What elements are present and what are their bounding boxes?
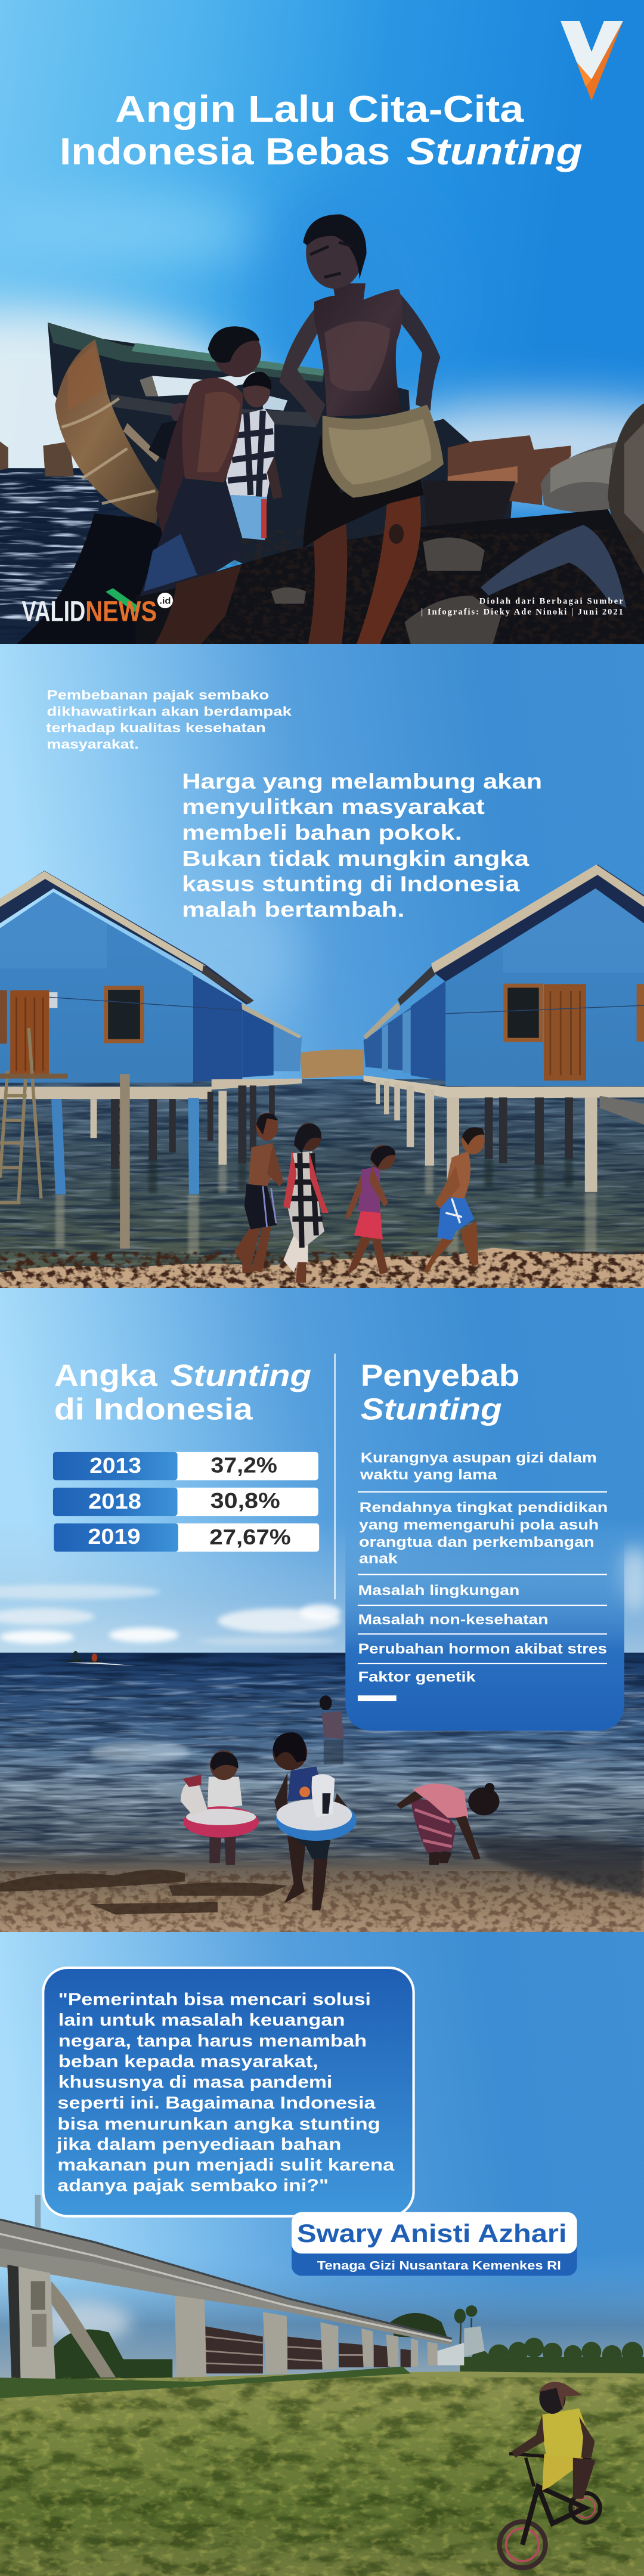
hero sky [0, 0, 644, 571]
main statement text: malah bertambah. [182, 897, 404, 921]
causes list: orangtua dan perkembangan [359, 1534, 595, 1550]
logo: validnews.id: .id [159, 596, 171, 606]
flooded water [0, 1079, 644, 1288]
rubble ground [135, 509, 644, 644]
heading: causes: Stunting [361, 1392, 502, 1426]
small lead text: Pembebanan pajak sembako [47, 688, 269, 702]
panel: expert quote [0, 1932, 644, 2576]
left row of houses [0, 871, 302, 1083]
person sitting on wreck [148, 403, 184, 460]
logo: validnews.id [22, 588, 173, 627]
title: Stunting [407, 131, 583, 173]
row 2018: 2018 [88, 1490, 141, 1513]
grass field [0, 2367, 644, 2576]
main statement text: Bukan tidak mungkin angka [182, 846, 530, 871]
title [60, 89, 583, 173]
panel: hero [0, 0, 644, 644]
heading: stunting rate: Stunting [171, 1358, 311, 1392]
name badge: Swary Anisti Azhari [297, 2219, 567, 2248]
heading: stunting rate: di Indonesia [54, 1392, 253, 1426]
causes list: Kurangnya asupan gizi dalam [361, 1450, 597, 1466]
bridge [0, 2195, 452, 2379]
distant mound [300, 1049, 364, 1079]
row 2018 [53, 1488, 318, 1516]
stilts and decks [0, 1074, 644, 1249]
row 2019: 2019 [88, 1525, 141, 1549]
small lead text [46, 688, 292, 752]
wet sand beach [0, 1837, 644, 1932]
logo: validnews.id: NEWS [85, 595, 157, 627]
quote card: beban kepada masyarakat, [58, 2052, 318, 2071]
main statement text: membeli bahan pokok. [182, 821, 462, 845]
causes list: Faktor genetik [358, 1669, 476, 1685]
panel: causes card [345, 1358, 624, 1731]
main statement text: Harga yang melambung akan [182, 769, 542, 793]
source credit: Diolah dari Berbagai Sumber [479, 597, 623, 606]
row 2019 [54, 1524, 319, 1552]
quote card: adanya pajak sembako ini?" [57, 2176, 329, 2195]
main statement text [182, 769, 542, 921]
main statement text: kasus stunting di Indonesia [182, 872, 520, 896]
quote card: lain untuk masalah keuangan [58, 2010, 345, 2029]
rusty hull plate [55, 339, 161, 524]
row 2013: 37,2% [210, 1453, 277, 1477]
name badge: Tenaga Gizi Nusantara Kemenkes RI [317, 2259, 561, 2272]
jet skis [66, 1651, 135, 1666]
quote card [43, 1968, 414, 2216]
right row of houses [363, 865, 644, 1086]
wooden ladder [0, 1028, 68, 1203]
child 1 [234, 1113, 283, 1273]
causes list: Rendahnya tingkat pendidikan [360, 1500, 608, 1516]
quote card: makanan pun menjadi sulit karena [57, 2155, 395, 2174]
logo: V mark [561, 21, 623, 101]
ocean [0, 1653, 644, 1884]
wading person [320, 1695, 344, 1764]
causes list: waktu yang lama [360, 1467, 497, 1483]
quote card: jika dalam penyediaan bahan [56, 2135, 341, 2154]
girl bending over [397, 1783, 500, 1865]
heading: causes [361, 1358, 519, 1426]
name badge [292, 2212, 577, 2276]
sea water [0, 468, 172, 644]
quote card: bisa menurunkan angka stunting [57, 2114, 380, 2133]
rocks [540, 403, 644, 579]
heading: stunting rate [54, 1358, 311, 1426]
logo: validnews.id: VALID [22, 595, 85, 627]
row 2018: 30,8% [210, 1489, 280, 1513]
row 2019: 27,67% [209, 1525, 291, 1549]
treeline [54, 2305, 644, 2380]
small lead text: masyarakat. [47, 737, 139, 752]
source credit: | Infografis: Dieky Ade Ninoki | Juni 2021 [421, 607, 623, 617]
vertical divider [335, 1354, 336, 1599]
houses sky [0, 644, 644, 1096]
causes list: Masalah lingkungan [358, 1583, 519, 1599]
quote card: khususnya di masa pandemi [58, 2072, 332, 2091]
small boy in plaid shirt [226, 372, 283, 540]
causes list: Masalah non-kesehatan [358, 1612, 549, 1628]
source credit [421, 597, 623, 617]
child 3 [345, 1145, 395, 1274]
shipwreck [48, 323, 513, 583]
rubble shore [0, 1248, 644, 1288]
row 2013: 2013 [89, 1454, 141, 1478]
title: Angin Lalu Cita-Cita [115, 89, 524, 131]
heading: causes: Penyebab [361, 1358, 519, 1392]
child on bicycle [500, 2382, 600, 2568]
panel: statistics and causes [0, 1288, 644, 1932]
quote card: negara, tanpa harus menambah [58, 2031, 367, 2050]
child with white float [273, 1732, 357, 1910]
main statement text: menyulitkan masyarakat [182, 794, 485, 819]
toddler with pink float [181, 1751, 259, 1865]
child 4 [425, 1128, 485, 1274]
causes list: anak [359, 1550, 398, 1566]
causes list [358, 1450, 608, 1701]
quote card: seperti ini. Bagaimana Indonesia [57, 2093, 376, 2112]
rusty ships on the right [423, 435, 571, 534]
row 2013 [53, 1452, 318, 1480]
beach sky [0, 1288, 644, 1658]
quote card: "Pemerintah bisa mencari solusi [58, 1990, 371, 2009]
causes list: Perubahan hormon akibat stres [358, 1641, 607, 1657]
middle boy [140, 326, 261, 644]
causes list: yang memengaruhi pola asuh [359, 1517, 599, 1533]
table: stunting by year [53, 1452, 319, 1552]
title: Indonesia Bebas [60, 131, 390, 173]
child 2 [283, 1123, 329, 1283]
small lead text: dikhawatirkan akan berdampak [47, 704, 292, 719]
big boy with sack [279, 215, 444, 644]
panel: houses [0, 644, 644, 1288]
distant boat [0, 441, 74, 476]
small lead text: terhadap kualitas kesehatan [46, 720, 266, 735]
heading: stunting rate: Angka [54, 1358, 158, 1392]
quote panel sky [0, 1932, 644, 2384]
